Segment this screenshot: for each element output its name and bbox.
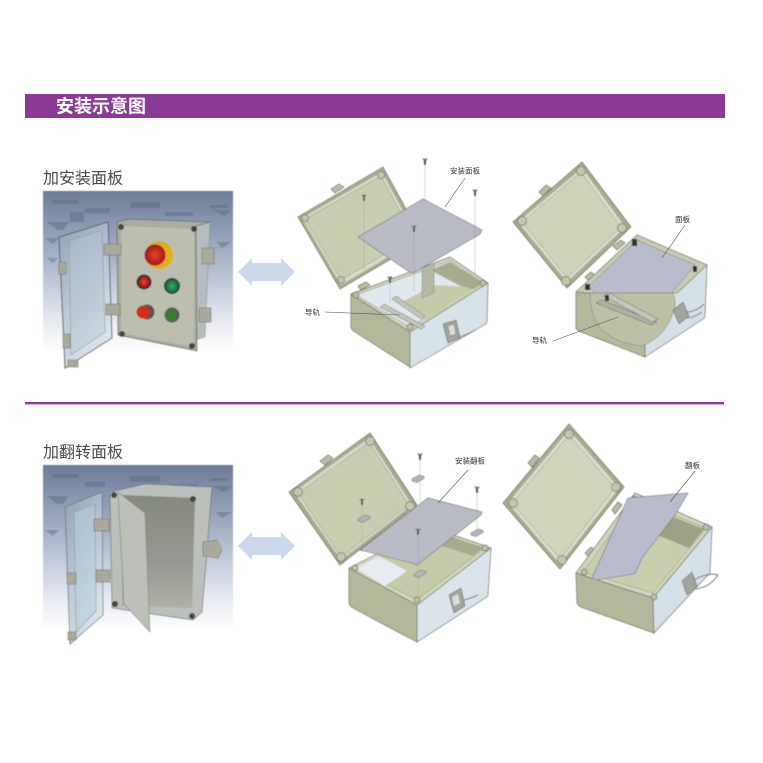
side latch <box>203 540 222 558</box>
label: flip panel: 翻板 <box>685 460 700 470</box>
flip panel <box>592 493 688 580</box>
panel <box>588 240 695 293</box>
label: flip panel <box>670 460 700 502</box>
emergency stop button <box>144 241 173 269</box>
photo: enclosure with mounting panel <box>43 191 233 368</box>
rails <box>380 296 425 329</box>
latch <box>449 588 478 613</box>
label: rail: 导轨 <box>532 335 547 345</box>
arrow: double headed <box>238 532 295 560</box>
label: flip panel mounting <box>438 456 485 503</box>
diagram: flip panel exploded view <box>289 433 491 642</box>
box body <box>576 235 707 357</box>
diagram: panel fitted with rail cutaway <box>513 162 707 357</box>
box body <box>349 527 491 642</box>
background tile pattern <box>45 474 232 536</box>
photo: enclosure with flip panel <box>43 465 233 644</box>
label: rail <box>305 307 400 317</box>
box body <box>576 493 712 633</box>
rail <box>596 293 658 325</box>
lid <box>503 424 624 569</box>
title bar <box>25 94 725 118</box>
door transparent <box>65 492 103 644</box>
lid <box>513 162 631 288</box>
screws <box>362 158 477 304</box>
label: rail <box>532 317 618 345</box>
label: panel <box>662 214 690 258</box>
enclosure side <box>195 221 210 340</box>
indicator lamps <box>136 274 180 322</box>
label: rail: 导轨 <box>305 307 320 317</box>
label: mounting panel: 安装面板 <box>450 166 480 176</box>
flip panel <box>360 498 482 565</box>
cutaway <box>590 293 675 346</box>
background tile pattern <box>45 200 232 263</box>
corner fasteners <box>585 239 697 301</box>
lid <box>289 433 417 565</box>
screws and brackets <box>358 454 483 598</box>
hinges and latches <box>59 244 214 367</box>
latch <box>673 302 704 324</box>
diagram: flip panel opened <box>503 424 718 633</box>
flip panel <box>118 492 150 632</box>
enclosure shell <box>110 484 212 620</box>
lid <box>298 167 423 290</box>
heading: add flip panel: 加翻转面板 <box>43 444 123 462</box>
box body <box>351 257 488 368</box>
heading: installation diagram: 安装示意图 <box>56 96 146 116</box>
section divider <box>25 402 724 404</box>
latch <box>443 320 475 343</box>
support posts <box>422 263 434 298</box>
hinges <box>67 519 110 640</box>
label: panel: 面板 <box>675 214 690 224</box>
door transparent <box>59 222 112 368</box>
enclosure face <box>117 219 210 351</box>
arrow: double headed <box>238 258 295 286</box>
label: mounting panel <box>445 166 480 207</box>
enclosure interior <box>122 495 195 608</box>
diagram: mounting panel exploded view <box>298 158 488 368</box>
latch <box>682 572 718 595</box>
heading: add mounting panel: 加安装面板 <box>43 170 123 188</box>
label: flip panel mounting: 安装翻板 <box>455 456 485 466</box>
mounting panel <box>358 199 482 273</box>
